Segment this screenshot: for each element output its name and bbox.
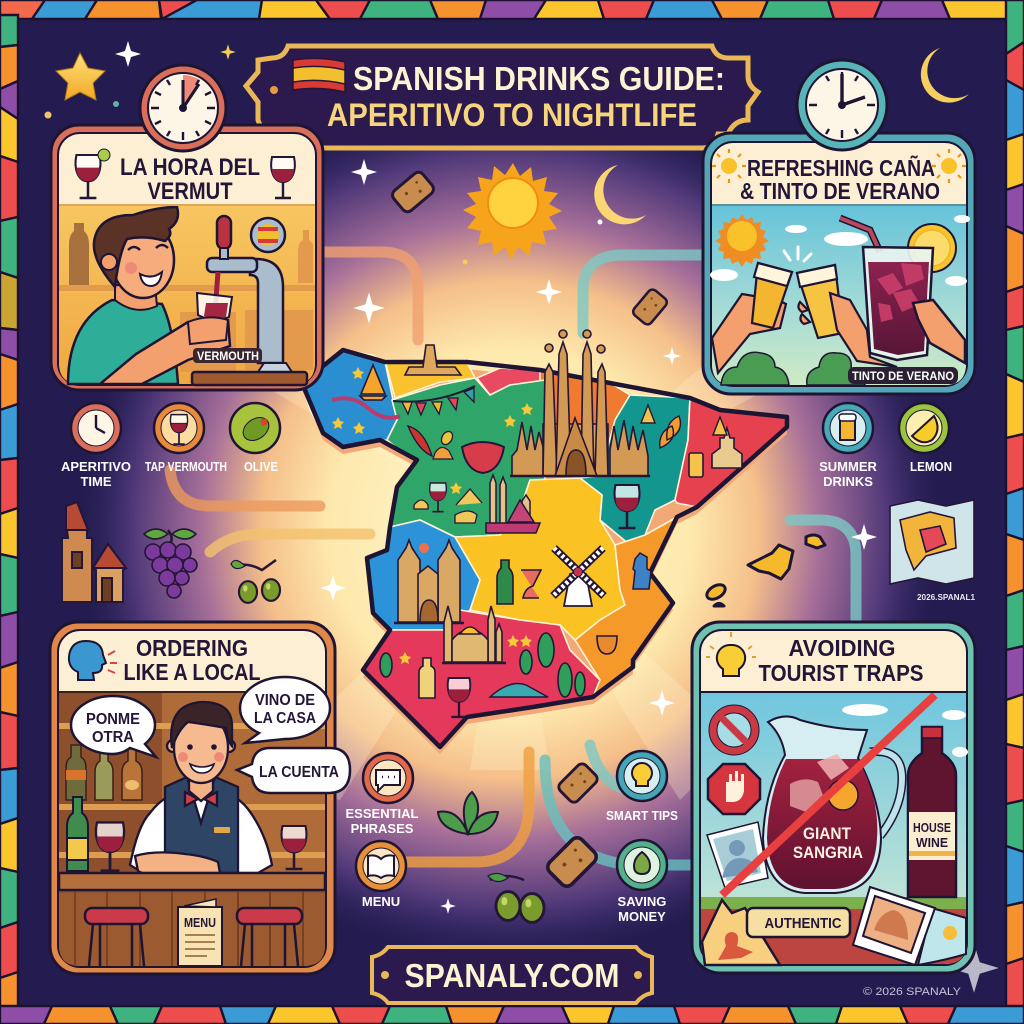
icon: star — [56, 53, 105, 100]
map icon: cathedral — [394, 540, 464, 623]
map icon: wine glass — [448, 678, 470, 717]
counter — [59, 873, 325, 890]
beer tap — [207, 216, 292, 372]
icon: olive — [230, 403, 280, 453]
speech bubble: ponme otra: OTRA — [92, 729, 134, 746]
icon: stop sign — [708, 764, 760, 814]
icon: olives — [488, 873, 544, 922]
icon: cork — [545, 835, 599, 889]
house wine bottle — [908, 727, 956, 897]
label: essential phrases: PHRASES — [351, 821, 414, 836]
counter — [192, 372, 307, 385]
map icons: trees — [380, 633, 585, 697]
stools — [85, 908, 302, 966]
scene: bar — [59, 206, 315, 384]
map icon: mosque of Cordoba — [442, 606, 506, 663]
bartender — [130, 702, 272, 873]
header — [59, 149, 315, 205]
label: tap vermouth: TAP VERMOUTH — [145, 459, 227, 474]
authentic label — [747, 908, 850, 937]
header: REFRESHING CAÑA — [747, 154, 935, 181]
speech bubble: la cuenta — [237, 748, 350, 793]
icon: essential phrases — [363, 753, 413, 803]
website banner — [372, 947, 652, 1003]
clock 2 — [797, 60, 887, 150]
tinto de verano glass — [840, 218, 965, 363]
man with glass — [68, 207, 230, 384]
icon: lemon — [899, 403, 949, 453]
map icon: small church — [712, 428, 742, 468]
icon column: tips — [606, 751, 678, 924]
map icon: mosque towers — [486, 475, 540, 533]
map icon: sailboat — [360, 365, 386, 400]
label: lemon: LEMON — [910, 459, 952, 474]
icon: aperitivo clock — [71, 403, 121, 453]
speech bubble: vino de la casa — [240, 677, 330, 743]
map icon: ribbon — [332, 398, 400, 418]
no-go slash — [722, 695, 935, 895]
icon: town — [62, 502, 126, 602]
clock 1 — [140, 65, 226, 151]
header — [712, 149, 966, 205]
scene: bar interior — [59, 693, 325, 966]
website banner: SPANALY.COM — [404, 957, 620, 994]
wine glass in hand — [188, 293, 232, 344]
label: saving money: MONEY — [618, 909, 666, 924]
map icon: windmill — [553, 548, 604, 606]
subheading: APERITIVO TO NIGHTLIFE — [327, 97, 697, 133]
icon column: phrases — [346, 753, 419, 909]
map icon: town on hill — [405, 345, 461, 375]
header: & TINTO DE VERANO — [740, 178, 940, 204]
icon: leaves — [438, 792, 498, 834]
map icon: pot — [597, 636, 617, 654]
map icon: red food bowl — [462, 442, 504, 473]
header — [59, 635, 325, 692]
speech bubble: ponme otra — [71, 696, 156, 757]
icon row: summer — [819, 403, 952, 489]
panel: Ordering Like a Local — [50, 622, 350, 974]
header: AVOIDING — [788, 635, 896, 661]
map icon: chili and snacks — [408, 426, 432, 456]
speech bubble: vino de la casa: VINO DE — [255, 692, 315, 709]
map icon: wine bottle — [497, 560, 513, 604]
connector paths — [170, 252, 856, 865]
scene — [701, 693, 968, 964]
giant sangria jug: SANGRIA — [793, 843, 863, 862]
map icon: sun burst — [419, 543, 429, 553]
menu — [178, 899, 222, 966]
wine glass — [282, 826, 306, 869]
header: LA HORA DEL — [120, 154, 260, 181]
map icon: stars — [332, 367, 533, 664]
icon: crescent moon — [594, 165, 646, 224]
hands clinking beers — [712, 263, 897, 373]
label: aperitivo time: TIME — [80, 474, 112, 489]
heading: SPANISH DRINKS GUIDE: — [353, 60, 725, 97]
authentic label: AUTHENTIC — [764, 915, 842, 932]
header: VERMUT — [148, 178, 233, 205]
giant sangria jug — [763, 716, 902, 893]
label: summer drinks: SUMMER — [819, 459, 877, 474]
label: essential phrases: ESSENTIAL — [346, 806, 419, 821]
photo — [707, 822, 768, 888]
icon: folded map — [890, 500, 974, 584]
map icon: oil bottle — [419, 658, 435, 698]
header — [701, 632, 966, 692]
label: aperitivo time: APERITIVO — [61, 459, 131, 474]
label: saving money: SAVING — [618, 894, 666, 909]
header: TOURIST TRAPS — [758, 660, 924, 686]
icon: beer — [823, 403, 873, 453]
flag — [293, 58, 345, 92]
map icon: dancer — [633, 553, 651, 589]
speech bubble: vino de la casa: LA CASA — [254, 710, 316, 727]
label: smart tips: SMART TIPS — [606, 808, 678, 823]
icon: cork — [631, 288, 669, 326]
panel: Refreshing Caña and Tinto de Verano — [703, 133, 975, 394]
map caption: 2026.SPANAL1 — [917, 593, 976, 602]
map icon: ham and pond — [490, 684, 548, 697]
central map of Spain — [302, 330, 787, 754]
label: tinto de verano: TINTO DE VERANO — [852, 369, 954, 383]
photos — [853, 887, 966, 965]
panel: La Hora del Vermut — [51, 125, 323, 390]
panel: Avoiding Tourist Traps — [692, 622, 975, 973]
scene: summer sky — [710, 206, 970, 385]
icon: sun — [715, 214, 769, 267]
green wine bottle — [67, 797, 88, 871]
icon: tap vermouth — [154, 403, 204, 453]
map icon: cocktail glass — [521, 570, 541, 598]
map icon: Sagrada Familia — [510, 330, 650, 476]
map fragment — [702, 900, 780, 965]
cheers marks — [784, 247, 811, 261]
icon: olives — [231, 560, 280, 603]
label: menu: MENU — [362, 894, 400, 909]
icon: cork — [557, 762, 599, 804]
copyright: © 2026 SPANALY — [863, 986, 962, 998]
map icon: bunting — [393, 386, 475, 415]
icon: sun — [463, 163, 562, 260]
speech bubble: la cuenta: LA CUENTA — [259, 764, 339, 781]
house wine bottle: WINE — [916, 835, 948, 850]
menu: MENU — [184, 915, 216, 930]
map icon: juice — [689, 453, 703, 477]
label: olive: OLIVE — [244, 459, 278, 474]
header: LIKE A LOCAL — [124, 659, 260, 685]
map icon: wine glass — [615, 485, 639, 528]
wine glass — [96, 822, 124, 871]
header: ORDERING — [136, 635, 248, 661]
icon: cork — [390, 170, 436, 214]
icon: saving money — [617, 840, 667, 890]
map icon: green hill and bush — [414, 489, 482, 523]
icon: smart tips — [617, 751, 667, 801]
title banner — [246, 46, 758, 148]
icon: menu book — [356, 841, 406, 891]
label: summer drinks: DRINKS — [823, 474, 873, 489]
giant sangria jug: GIANT — [803, 824, 852, 843]
speech bubble: ponme otra: PONME — [86, 711, 140, 728]
Balearic islands — [704, 535, 825, 606]
map icon: wine glass — [430, 483, 446, 512]
label: vermouth: VERMOUTH — [197, 349, 259, 363]
icon: grapes — [144, 529, 197, 598]
icon: crescent moon top right — [921, 48, 969, 103]
icon: prohibited — [709, 705, 759, 755]
icon row: vermouth — [61, 403, 280, 489]
map icon: trees and leaves — [641, 405, 727, 435]
house wine bottle: HOUSE — [913, 820, 951, 835]
